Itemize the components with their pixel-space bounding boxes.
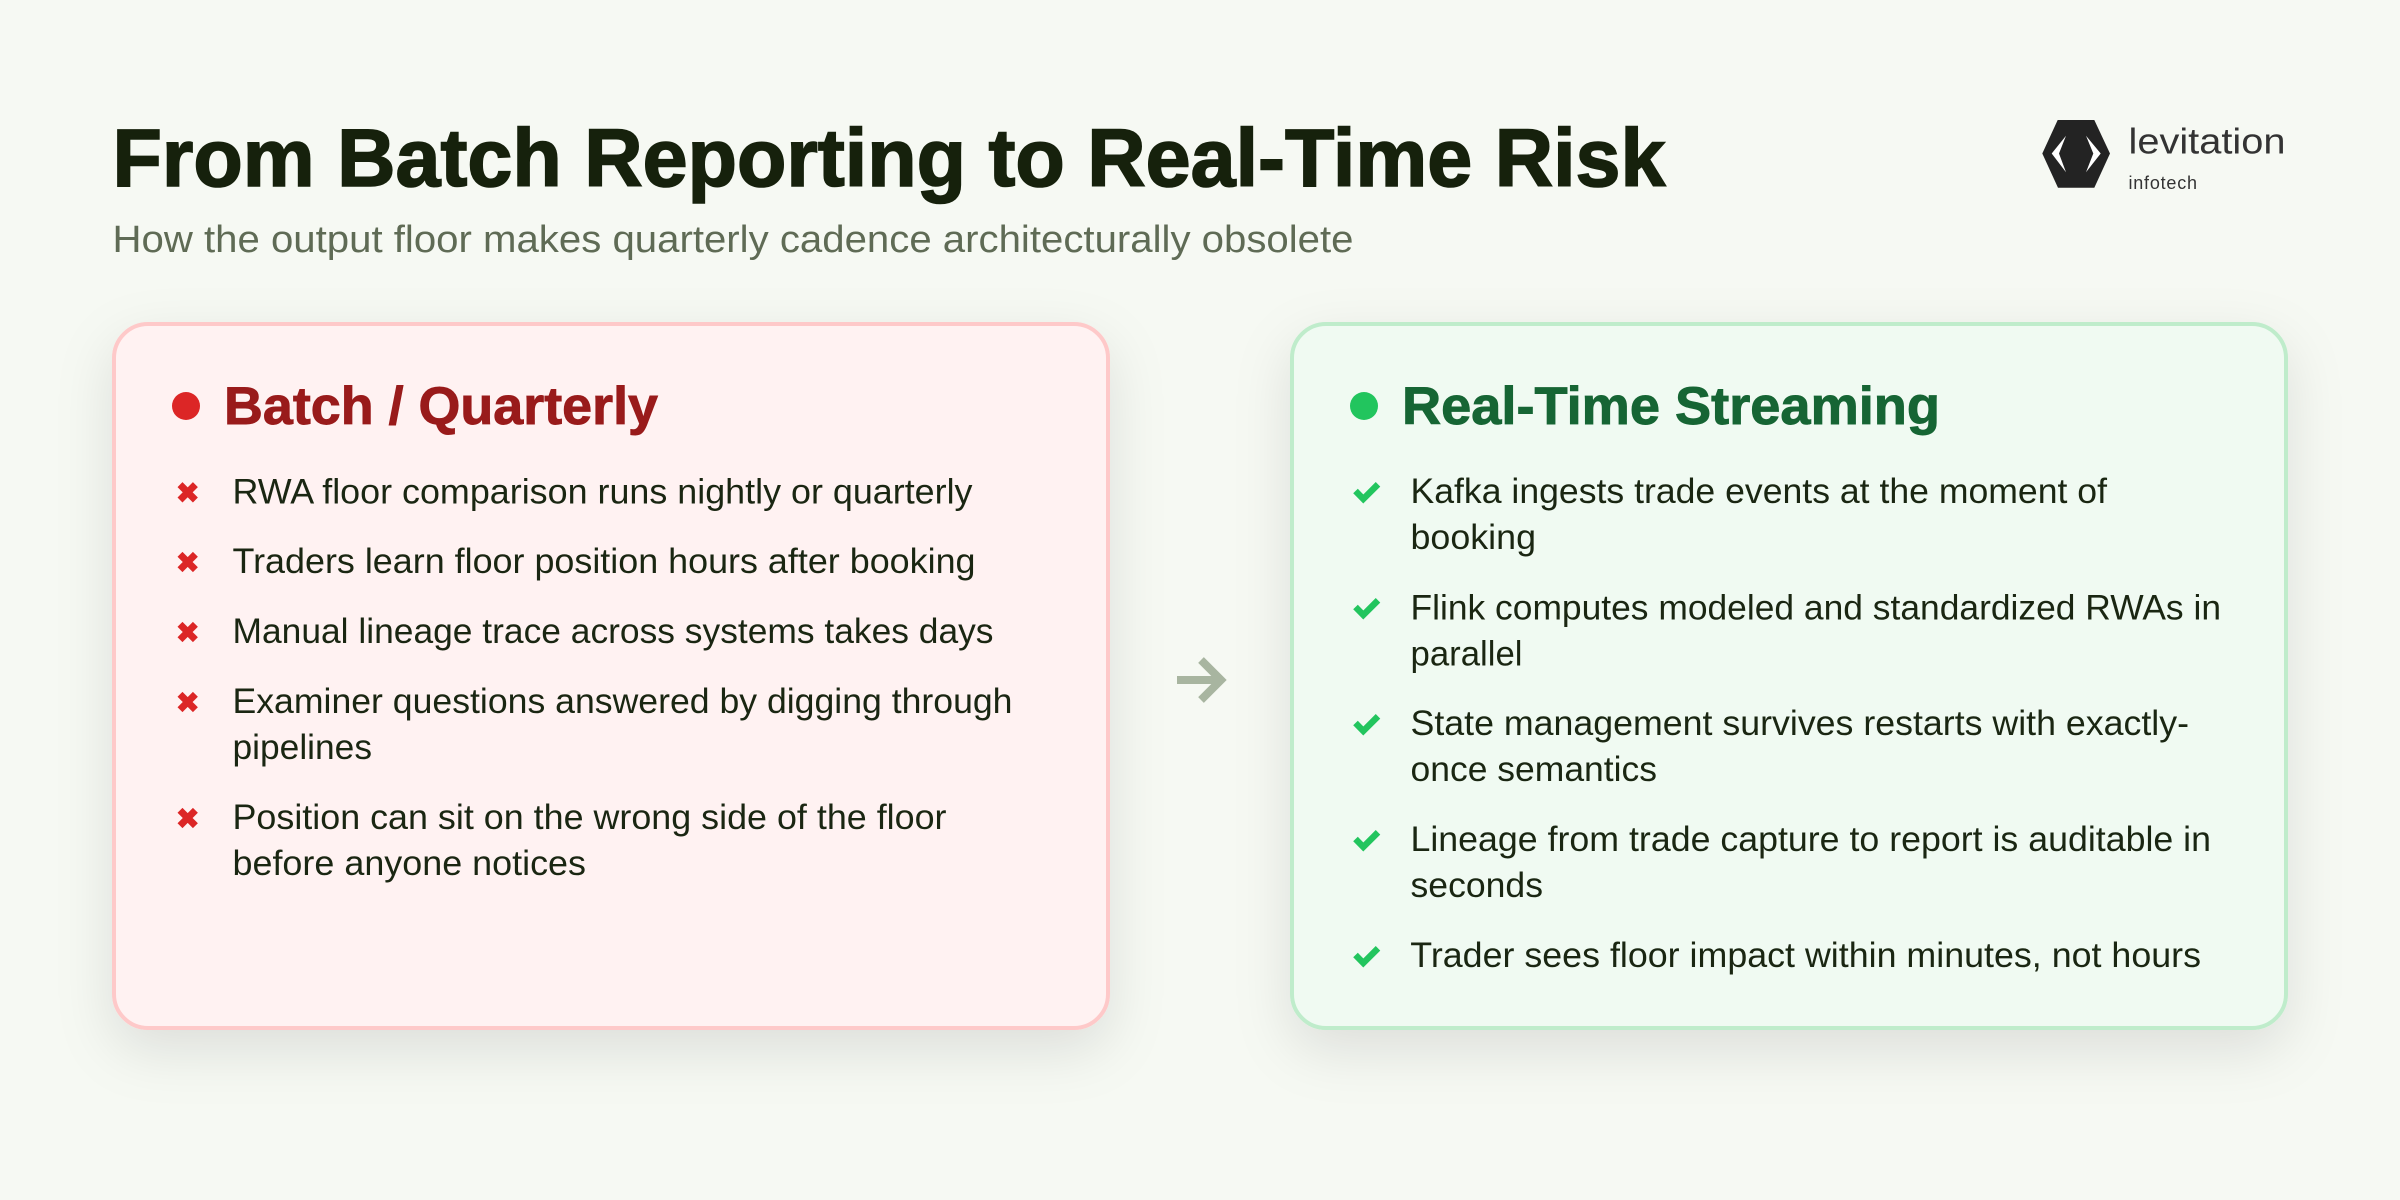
list item: kafka ingests: booking <box>1410 518 1536 557</box>
title: From Batch Reporting to Real-Time Risk <box>112 113 1666 204</box>
panel: real-time streaming <box>1292 324 2286 1028</box>
list item: manual lineage trace: Manual lineage trace across systems takes days <box>232 612 994 651</box>
list item: position wrong side of floor: before anyone notices <box>232 844 586 883</box>
panel background <box>1292 324 2286 1028</box>
panel heading: real-time streaming: Real-Time Streaming <box>1402 377 1940 436</box>
list item: state management <box>1356 704 2189 789</box>
panel background <box>114 324 1108 1028</box>
logo: levitation infotech <box>2042 120 2286 193</box>
list item: lineage auditable <box>1356 820 2211 905</box>
list item: examiner questions <box>180 682 1013 767</box>
list item: lineage auditable: Lineage from trade capture to report is auditable in <box>1410 820 2211 859</box>
subtitle: How the output floor makes quarterly cadence architecturally obsolete <box>112 219 1354 261</box>
panel: batch / quarterly <box>114 324 1108 1028</box>
list item: traders learn floor position: Traders learn floor position hours after booking <box>232 542 975 581</box>
list item: trader sees floor impact: Trader sees floor impact within minutes, not hours <box>1410 936 2201 975</box>
list item: position wrong side of floor: Position can sit on the wrong side of the floor <box>232 798 947 837</box>
list item: lineage auditable: seconds <box>1410 866 1543 905</box>
list item: examiner questions: Examiner questions answered by digging through <box>232 682 1013 721</box>
logo wordmark: levitation <box>2128 120 2286 161</box>
arrow <box>1177 660 1221 700</box>
list item: examiner questions: pipelines <box>232 728 372 767</box>
list item: flink computes <box>1356 588 2221 674</box>
list item: position wrong side of floor <box>180 798 947 883</box>
icon: hexagon logo mark <box>2042 120 2110 188</box>
list item: kafka ingests: Kafka ingests trade events at the moment of <box>1410 472 2107 511</box>
panel heading: batch / quarterly: Batch / Quarterly <box>224 377 659 436</box>
list item: kafka ingests <box>1356 472 2107 557</box>
list item: RWA floor comparison: RWA floor comparison runs nightly or quarterly <box>232 472 973 511</box>
list item: flink computes: Flink computes modeled and standardized RWAs in <box>1410 588 2221 628</box>
list item: state management: State management survives restarts with exactly- <box>1410 704 2189 743</box>
logo tagline: infotech <box>2128 173 2197 193</box>
list item: state management: once semantics <box>1410 750 1657 789</box>
list item: flink computes: parallel <box>1410 634 1522 674</box>
